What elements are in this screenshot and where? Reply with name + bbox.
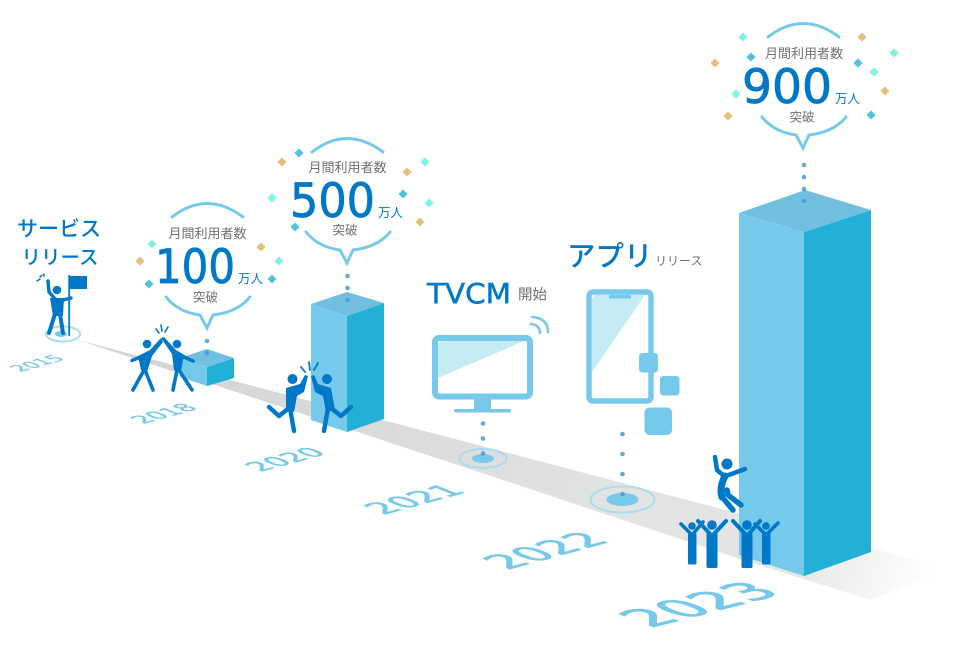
icon: jumping person xyxy=(715,457,745,510)
bar: medium xyxy=(311,292,384,432)
icon: broadcast waves xyxy=(531,317,548,333)
bubble text: 5 million xyxy=(290,160,404,238)
icon: television xyxy=(435,338,530,412)
speech bubble xyxy=(762,24,846,148)
heading: service release: サービス xyxy=(17,218,101,241)
year label 2018: 2018 xyxy=(125,401,205,426)
year label 2015: 2015 xyxy=(5,353,70,374)
icon: smartphone xyxy=(589,292,651,401)
label: start: 開始 xyxy=(518,286,547,304)
year label 2020: 2020 xyxy=(238,445,334,475)
speech bubble xyxy=(166,204,250,328)
connector dots xyxy=(620,432,625,496)
milestone: 9 million users 2023 xyxy=(681,24,899,576)
connector dots xyxy=(481,421,485,456)
location rings xyxy=(460,449,506,468)
connector dots xyxy=(345,274,350,302)
bubble text: 9 million: 月間利用者数 xyxy=(765,46,843,61)
sparkles xyxy=(267,148,434,232)
bubble text: 5 million: 500 xyxy=(290,174,375,229)
icon: two people high five xyxy=(132,325,193,390)
label: release: リリース xyxy=(655,254,702,268)
sparkles xyxy=(135,239,284,289)
location rings xyxy=(46,326,80,342)
icon: group of cheering people xyxy=(681,520,778,568)
bubble text: 9 million xyxy=(742,46,861,124)
speech bubble xyxy=(306,138,390,263)
icon: two people jumping high five xyxy=(269,362,351,431)
bubble text: 1 million xyxy=(155,226,264,304)
bubble text: 1 million: 万人 xyxy=(238,272,264,286)
milestone: TVCM 2021 xyxy=(426,278,548,468)
icon: app squares xyxy=(639,353,680,435)
year label 2023: 2023 xyxy=(603,576,796,632)
bubble text: 1 million: 突破 xyxy=(193,290,218,304)
heading: release line 2: リリース xyxy=(21,247,99,269)
milestone: service release 2015 xyxy=(17,218,101,342)
heading: app: アプリ xyxy=(567,241,653,273)
bar: tall xyxy=(739,190,871,576)
connector dots xyxy=(802,163,806,203)
bubble text: 1 million: 100 xyxy=(155,240,235,295)
heading: TVCM: TVCM xyxy=(426,278,511,310)
milestone: app release 2022 xyxy=(567,241,702,512)
bubble text: 5 million: 万人 xyxy=(378,206,404,220)
bubble text: 1 million: 月間利用者数 xyxy=(168,226,247,241)
sparkles xyxy=(710,32,899,121)
bubble text: 9 million: 900 xyxy=(742,60,832,115)
milestone: 5 million users 2020 xyxy=(267,138,434,432)
icon: person with flag xyxy=(37,274,87,336)
bubble text: 9 million: 万人 xyxy=(835,92,861,106)
timeline road xyxy=(78,340,950,600)
location rings xyxy=(590,486,654,512)
bar: small box xyxy=(180,349,234,386)
bubble text: 5 million: 月間利用者数 xyxy=(308,160,387,175)
bubble text: 9 million: 突破 xyxy=(789,110,815,124)
milestone: 1 million users 2018 xyxy=(132,204,284,390)
year label 2021: 2021 xyxy=(355,481,474,518)
connector dots xyxy=(205,339,209,355)
year label 2022: 2022 xyxy=(471,528,621,574)
bubble text: 5 million: 突破 xyxy=(332,222,358,238)
